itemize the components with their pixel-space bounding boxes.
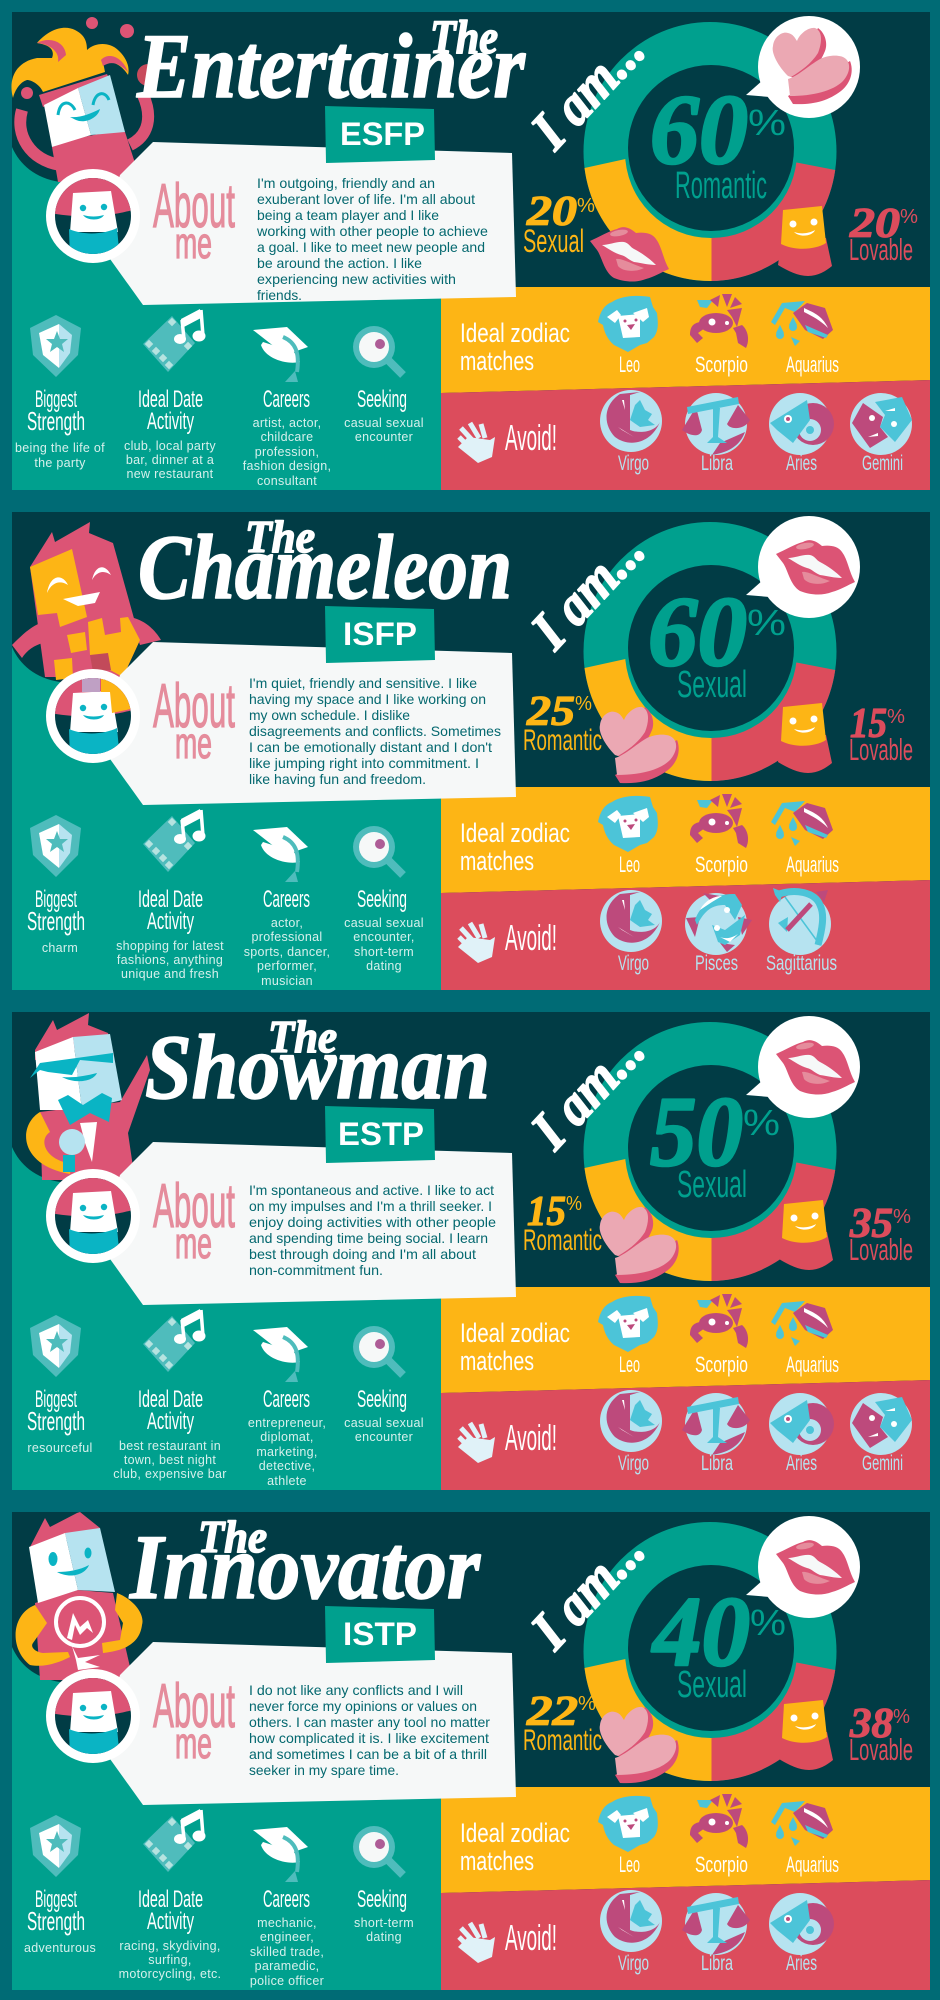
heading: I am: I am... xyxy=(519,1019,657,1162)
stat: careers: detective, xyxy=(259,1459,315,1473)
about text: friends. xyxy=(257,287,302,303)
stat: seeking: casual sexual xyxy=(344,416,424,430)
stat: careers: artist, actor, xyxy=(253,416,321,430)
about me heading: About xyxy=(153,1672,235,1741)
character: chameleon xyxy=(12,522,161,680)
stat: biggest strength: Strength xyxy=(27,406,85,436)
big percent: % xyxy=(747,602,786,643)
stat: biggest strength: Strength xyxy=(27,1406,85,1436)
stat: careers: actor, xyxy=(271,916,303,930)
stat: ideal date activity: Activity xyxy=(147,1908,194,1935)
stat: careers: Careers xyxy=(263,386,310,413)
stat: biggest strength: Biggest xyxy=(35,886,77,913)
stat: careers: marketing, xyxy=(256,1445,318,1459)
title: The xyxy=(245,511,315,562)
zodiac matches: Scorpio xyxy=(695,852,748,877)
stat: ideal date activity: best restaurant in xyxy=(119,1439,221,1453)
stat: careers: Careers xyxy=(263,1886,310,1913)
stat: careers: performer, xyxy=(257,959,317,973)
icon: shield xyxy=(30,315,81,377)
stat: ideal date activity xyxy=(124,386,216,481)
zodiac avoid: Virgo xyxy=(618,452,649,475)
stat: careers: diplomat, xyxy=(260,1430,314,1444)
stat: careers: athlete xyxy=(267,1474,307,1488)
zodiac matches: Scorpio xyxy=(695,352,748,377)
zodiac avoid xyxy=(458,1890,834,1975)
zodiac matches: matches xyxy=(460,1346,534,1376)
title: Showman xyxy=(145,1016,490,1118)
stat: ideal date activity: Ideal Date xyxy=(138,1886,203,1913)
stat: careers xyxy=(243,386,331,488)
zodiac avoid: Sagittarius xyxy=(766,952,837,975)
donut chart: 40 sexual, 22 romantic, 38 lovable xyxy=(584,1522,836,1781)
icon: film and music xyxy=(143,1309,206,1372)
about me heading: About xyxy=(153,172,235,241)
stat: ideal date activity: Activity xyxy=(147,408,194,435)
stat: careers xyxy=(248,1386,326,1488)
badge: ISTP: ISTP xyxy=(343,1616,417,1652)
about me heading: me xyxy=(175,219,212,268)
label: romantic percent: % xyxy=(575,693,592,715)
about text: I'm outgoing, friendly and an xyxy=(257,175,435,191)
about text: working with other people to achieve xyxy=(256,223,488,239)
badge: ESTP: ESTP xyxy=(338,1116,424,1152)
zodiac matches: Leo xyxy=(619,1852,640,1877)
icon: shield xyxy=(30,815,81,877)
icon: magnifier xyxy=(353,1826,403,1875)
about text: non-commitment fun. xyxy=(249,1262,383,1278)
stat: careers xyxy=(250,1886,324,1988)
about text: best through doing and I'm all about xyxy=(249,1246,476,1262)
avatar xyxy=(46,1669,140,1763)
about me heading: About xyxy=(153,1172,235,1241)
badge: ESFP: ESFP xyxy=(340,116,425,152)
about me heading: About xyxy=(153,672,235,741)
title: Entertainer xyxy=(136,15,526,117)
big percent: 50 xyxy=(650,1076,743,1187)
stat: seeking: short-term xyxy=(354,1916,414,1930)
stat: ideal date activity: racing, skydiving, xyxy=(119,1939,221,1953)
label: romantic percent xyxy=(523,1189,602,1257)
label: lovable percent: 38 xyxy=(849,1701,893,1747)
stat: ideal date activity: new restaurant xyxy=(127,467,214,481)
donut chart: 60 romantic, 20 sexual, 20 lovable xyxy=(584,22,836,281)
stat: seeking: Seeking xyxy=(357,886,407,913)
zodiac matches: matches xyxy=(460,1846,534,1876)
character: innovator xyxy=(16,1512,143,1680)
about box xyxy=(100,1642,516,1805)
about text: experiencing new activities with xyxy=(257,271,456,287)
zodiac matches xyxy=(460,1294,839,1377)
panel: The Innovator xyxy=(12,1511,930,1990)
stat: ideal date activity xyxy=(116,886,224,981)
icon: graduation cap xyxy=(253,1327,308,1382)
big percent: Romantic xyxy=(675,165,767,207)
stat: biggest strength xyxy=(15,386,105,470)
stat: careers: Careers xyxy=(263,1386,310,1413)
about text: I'm quiet, friendly and sensitive. I like xyxy=(249,675,477,691)
stat: seeking: Seeking xyxy=(357,1386,407,1413)
zodiac matches: Leo xyxy=(619,852,640,877)
big percent: 60 xyxy=(650,74,748,185)
heading: I am: I am... xyxy=(519,519,657,662)
about text: and sometimes I can be a bit of a thrill xyxy=(249,1746,487,1762)
icon: lovable character xyxy=(778,206,832,276)
stat: biggest strength: adventurous xyxy=(24,1941,96,1955)
big percent: 60 xyxy=(648,576,747,687)
about text: having my space and I like working on xyxy=(249,691,486,707)
stat: careers: Careers xyxy=(263,886,310,913)
about text: like having fun and freedom. xyxy=(249,771,426,787)
zodiac matches: Aquarius xyxy=(786,1352,839,1377)
stat: careers: paramedic, xyxy=(255,1959,319,1973)
stat: careers: police officer xyxy=(250,1974,324,1988)
icon: shield xyxy=(30,1815,81,1877)
label: lovable percent xyxy=(849,201,918,267)
zodiac avoid: Libra xyxy=(701,1452,733,1475)
label: lovable percent: 35 xyxy=(849,1201,893,1247)
big percent: Sexual xyxy=(677,1664,747,1706)
label: lovable percent xyxy=(849,701,913,767)
zodiac matches xyxy=(460,794,839,877)
label: lovable percent: % xyxy=(887,706,905,728)
big percent xyxy=(648,576,786,706)
about text: be around the action. I like xyxy=(257,255,422,271)
about text: seeker in my spare time. xyxy=(249,1762,399,1778)
about text xyxy=(249,675,501,787)
icon: lovable character xyxy=(779,1200,833,1270)
stat: ideal date activity: shopping for latest xyxy=(116,939,224,953)
stat: careers: fashion design, xyxy=(243,459,331,473)
label: lovable percent: % xyxy=(900,206,918,228)
zodiac avoid: Avoid! xyxy=(505,417,557,458)
stat: ideal date activity: unique and fresh xyxy=(121,967,219,981)
character: showman xyxy=(26,1013,150,1180)
icon: film and music xyxy=(143,1809,206,1872)
title: The xyxy=(268,1011,337,1062)
badge: ISFP: ISFP xyxy=(343,616,417,652)
zodiac avoid: Avoid! xyxy=(505,917,557,958)
about text xyxy=(256,175,488,303)
speech bubble xyxy=(746,1016,860,1118)
about me heading xyxy=(153,1172,235,1268)
big percent: Sexual xyxy=(677,664,747,706)
zodiac matches: Ideal zodiac xyxy=(460,1818,570,1848)
stat: biggest strength: charm xyxy=(42,941,78,955)
stat: seeking: encounter xyxy=(355,1430,413,1444)
stat: seeking: Seeking xyxy=(357,386,407,413)
zodiac matches: Scorpio xyxy=(695,1352,748,1377)
character: jester xyxy=(11,17,159,182)
icon: heart xyxy=(600,707,679,783)
stat: careers: childcare xyxy=(261,430,313,444)
big percent: % xyxy=(748,102,786,143)
label: lovable percent xyxy=(849,1201,913,1267)
stat: seeking: encounter, xyxy=(353,930,415,944)
label: romantic percent: Romantic xyxy=(523,724,602,757)
label: lovable percent: 20 xyxy=(849,201,900,247)
about box xyxy=(100,142,516,305)
zodiac matches xyxy=(460,294,839,377)
stat: ideal date activity: club, local party xyxy=(124,439,216,453)
stat: ideal date activity: surfing, xyxy=(148,1953,192,1967)
stat: seeking: Seeking xyxy=(357,1886,407,1913)
panel: The Entertainer xyxy=(11,11,930,490)
label: romantic percent xyxy=(523,689,602,757)
badge: ISFP xyxy=(325,606,435,663)
about me heading: me xyxy=(175,1719,212,1768)
about text: and spending time being social. I learn xyxy=(249,1230,488,1246)
avatar xyxy=(46,1169,140,1263)
badge: ESFP xyxy=(325,106,435,163)
zodiac matches: Aquarius xyxy=(786,1852,839,1877)
icon: graduation cap xyxy=(253,327,308,382)
badge: ISTP xyxy=(325,1606,435,1663)
about text: others. I can master any tool no matter xyxy=(249,1714,490,1730)
stat: careers: professional xyxy=(251,930,323,944)
donut chart: 50 sexual, 15 romantic, 35 lovable xyxy=(584,1022,836,1281)
donut chart: 60 sexual, 25 romantic, 15 lovable xyxy=(584,522,836,781)
stat: careers: engineer, xyxy=(260,1930,314,1944)
label: lovable percent xyxy=(849,1701,913,1767)
stat: seeking xyxy=(344,1386,424,1444)
about text: how complicated it is. I like excitement xyxy=(249,1730,489,1746)
about text: I can be emotionally distant and I don't xyxy=(249,739,492,755)
stat: ideal date activity: fashions, anything xyxy=(117,953,223,967)
zodiac avoid: Avoid! xyxy=(505,1417,557,1458)
stat: ideal date activity: motorcycling, etc. xyxy=(119,1967,221,1981)
label: lovable percent: 15 xyxy=(850,701,887,747)
about text: I'm spontaneous and active. I like to act xyxy=(249,1182,494,1198)
label: sexual percent: % xyxy=(577,195,595,217)
stat: careers: profession, xyxy=(255,445,319,459)
stat: ideal date activity: Ideal Date xyxy=(138,1386,203,1413)
icon: lovable character xyxy=(778,703,832,773)
stat: biggest strength: Strength xyxy=(27,1906,85,1936)
stat: ideal date activity: Activity xyxy=(147,908,194,935)
icon: heart xyxy=(773,28,852,104)
about me heading: me xyxy=(175,1219,212,1268)
stat: ideal date activity: Ideal Date xyxy=(138,386,203,413)
stat: biggest strength: Biggest xyxy=(35,1886,77,1913)
zodiac matches: matches xyxy=(460,846,534,876)
title: The xyxy=(430,11,498,64)
zodiac matches: Scorpio xyxy=(695,1852,748,1877)
icon: film and music xyxy=(143,809,206,872)
icon: lips xyxy=(590,227,669,282)
stat: careers: consultant xyxy=(257,474,317,488)
stat: ideal date activity: Activity xyxy=(147,1408,194,1435)
about text: on my impulses and I'm a thrill seeker. I xyxy=(249,1198,492,1214)
stat: careers: entrepreneur, xyxy=(248,1416,326,1430)
stat: seeking xyxy=(344,386,424,444)
stat: seeking: casual sexual xyxy=(344,916,424,930)
stat: careers: sports, dancer, xyxy=(244,945,330,959)
about text: like jumping right into commitment. I xyxy=(249,755,479,771)
about box xyxy=(100,1142,516,1305)
label: sexual percent xyxy=(523,189,595,259)
stat: ideal date activity: town, best night xyxy=(124,1453,216,1467)
zodiac avoid xyxy=(458,390,912,475)
zodiac avoid: Libra xyxy=(701,1952,733,1975)
stat: seeking: casual sexual xyxy=(344,1416,424,1430)
stat: careers: skilled trade, xyxy=(250,1945,324,1959)
zodiac avoid: Libra xyxy=(701,452,733,475)
zodiac avoid: Virgo xyxy=(618,1452,649,1475)
label: sexual percent: 20 xyxy=(526,189,577,235)
stat: biggest strength: being the life of xyxy=(15,441,105,455)
zodiac matches: Aquarius xyxy=(786,852,839,877)
stat: ideal date activity xyxy=(113,1386,227,1481)
zodiac matches: Ideal zodiac xyxy=(460,818,570,848)
zodiac avoid: Virgo xyxy=(618,1952,649,1975)
label: lovable percent: % xyxy=(893,1206,911,1228)
stat: biggest strength: Biggest xyxy=(35,1386,77,1413)
label: romantic percent: % xyxy=(578,1693,596,1715)
about text: a goal. I like to meet new people and xyxy=(257,239,485,255)
icon: heart xyxy=(600,1207,679,1283)
big percent: Sexual xyxy=(677,1164,747,1206)
stat: biggest strength xyxy=(24,1886,96,1955)
label: romantic percent: Romantic xyxy=(523,1224,602,1257)
big percent xyxy=(651,1576,786,1706)
zodiac avoid: Gemini xyxy=(862,452,903,475)
zodiac avoid: Gemini xyxy=(862,1452,903,1475)
label: romantic percent: % xyxy=(566,1193,582,1215)
about text xyxy=(249,1182,496,1278)
speech bubble xyxy=(746,16,860,118)
icon: graduation cap xyxy=(253,1827,308,1882)
avatar xyxy=(46,169,140,263)
label: romantic percent: 22 xyxy=(526,1689,578,1735)
stat: ideal date activity xyxy=(119,1886,221,1981)
panel: The Showman xyxy=(12,1011,930,1490)
speech bubble xyxy=(746,1516,860,1618)
about text xyxy=(249,1682,490,1778)
label: romantic percent: 25 xyxy=(526,689,575,735)
big percent: % xyxy=(743,1102,780,1143)
zodiac avoid: Aries xyxy=(786,1452,817,1475)
icon: graduation cap xyxy=(253,827,308,882)
icon: magnifier xyxy=(353,1326,403,1375)
zodiac avoid: Pisces xyxy=(695,952,738,975)
icon: lips xyxy=(776,1040,855,1095)
panel: The Chameleon xyxy=(12,511,930,990)
icon: lips xyxy=(776,540,855,595)
zodiac avoid: Aries xyxy=(786,1952,817,1975)
zodiac matches: Ideal zodiac xyxy=(460,1318,570,1348)
zodiac avoid: Avoid! xyxy=(505,1917,557,1958)
zodiac matches: Aquarius xyxy=(786,352,839,377)
big percent xyxy=(650,74,786,207)
badge: ESTP xyxy=(325,1106,435,1163)
stat: seeking: encounter xyxy=(355,430,413,444)
about box xyxy=(100,642,516,805)
label: lovable percent: % xyxy=(893,1706,910,1728)
title: Innovator xyxy=(129,1516,481,1618)
zodiac avoid: Aries xyxy=(786,452,817,475)
stat: seeking: dating xyxy=(366,1930,402,1944)
about text: being a team player and I like xyxy=(257,207,439,223)
avatar xyxy=(46,669,140,763)
zodiac matches: Leo xyxy=(619,1352,640,1377)
stat: biggest strength: the party xyxy=(34,456,86,470)
zodiac avoid xyxy=(458,1390,912,1475)
stat: ideal date activity: club, expensive bar xyxy=(113,1467,227,1481)
icon: lips xyxy=(776,1540,855,1595)
stat: biggest strength xyxy=(27,886,85,955)
stat: biggest strength: resourceful xyxy=(27,1441,93,1455)
big percent: % xyxy=(750,1602,786,1643)
icon: heart xyxy=(600,1707,679,1783)
stat: ideal date activity: bar, dinner at a xyxy=(126,453,214,467)
about text: my own schedule. I dislike xyxy=(249,707,410,723)
stat: careers: musician xyxy=(261,974,313,988)
zodiac avoid xyxy=(458,888,837,975)
heading: I am: I am... xyxy=(519,19,657,162)
icon: shield xyxy=(30,1315,81,1377)
stat: biggest strength: Biggest xyxy=(35,386,77,413)
about me heading xyxy=(153,1672,235,1768)
label: sexual percent: Sexual xyxy=(523,223,584,259)
label: romantic percent xyxy=(523,1689,602,1757)
stat: ideal date activity: Ideal Date xyxy=(138,886,203,913)
heading: I am: I am... xyxy=(519,1519,657,1662)
stat: biggest strength xyxy=(27,1386,93,1455)
about me heading: me xyxy=(175,719,212,768)
stat: seeking xyxy=(344,886,424,973)
about text: exuberant lover of life. I'm all about xyxy=(257,191,475,207)
zodiac avoid: Virgo xyxy=(618,952,649,975)
about me heading xyxy=(153,172,235,268)
title: Chameleon xyxy=(138,516,512,618)
stat: seeking xyxy=(354,1886,414,1944)
stat: seeking: short-term xyxy=(354,945,414,959)
about text: never force my opinions or values on xyxy=(249,1698,477,1714)
zodiac matches: Leo xyxy=(619,352,640,377)
stat: careers: mechanic, xyxy=(257,1916,317,1930)
stat: careers xyxy=(244,886,330,988)
title: The xyxy=(198,1511,267,1562)
big percent xyxy=(650,1076,780,1206)
icon: magnifier xyxy=(353,326,403,375)
about text: I do not like any conflicts and I will xyxy=(249,1682,463,1698)
zodiac matches xyxy=(460,1794,839,1877)
about text: disagreements and conflicts. Sometimes xyxy=(249,723,501,739)
about text: enjoy doing activities with other people xyxy=(249,1214,496,1230)
icon: magnifier xyxy=(353,826,403,875)
icon: lovable character xyxy=(779,1700,833,1770)
icon: film and music xyxy=(143,309,206,372)
zodiac matches: Ideal zodiac xyxy=(460,318,570,348)
zodiac matches: matches xyxy=(460,346,534,376)
big percent: 40 xyxy=(651,1576,750,1687)
speech bubble xyxy=(746,516,860,618)
stat: biggest strength: Strength xyxy=(27,906,85,936)
label: romantic percent: 15 xyxy=(527,1189,566,1235)
stat: seeking: dating xyxy=(366,959,402,973)
about me heading xyxy=(153,672,235,768)
label: romantic percent: Romantic xyxy=(523,1724,602,1757)
